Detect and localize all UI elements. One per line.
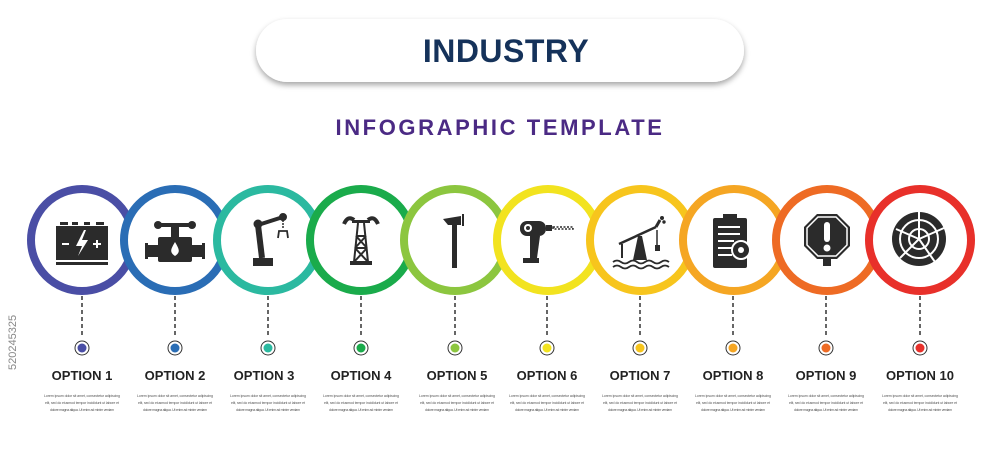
- option 5: Lorem ipsum dolor sit amet, consectetur adipiscing: [419, 394, 495, 398]
- option 1: Lorem ipsum dolor sit amet, consectetur adipiscing: [44, 394, 120, 398]
- option 6: dolore magna aliqua. Ut enim ad minim veniam: [515, 408, 579, 412]
- option 4: OPTION 4: [331, 368, 392, 383]
- icon: battery: [56, 222, 108, 265]
- option 1: OPTION 1: [52, 368, 112, 383]
- option 7: OPTION 7: [610, 368, 670, 383]
- option 9: [776, 189, 878, 412]
- option 2: [124, 189, 226, 412]
- icon: warning sign: [804, 214, 850, 266]
- option 9: Lorem ipsum dolor sit amet, consectetur adipiscing: [788, 394, 864, 398]
- option 8: dolore magna aliqua. Ut enim ad minim veniam: [701, 408, 765, 412]
- option 4: Lorem ipsum dolor sit amet, consectetur adipiscing: [323, 394, 399, 398]
- option 9: dolore magna aliqua. Ut enim ad minim veniam: [794, 408, 858, 412]
- option 7: elit, sed do eiusmod tempor incididunt ut labore et: [603, 401, 677, 405]
- option 6: OPTION 6: [517, 368, 577, 383]
- option 1: dolore magna aliqua. Ut enim ad minim veniam: [50, 408, 114, 412]
- option 3: OPTION 3: [234, 368, 294, 383]
- option 10: Lorem ipsum dolor sit amet, consectetur adipiscing: [882, 394, 958, 398]
- icon: hammer: [443, 214, 464, 268]
- option 4: dolore magna aliqua. Ut enim ad minim veniam: [329, 408, 393, 412]
- option 8: Lorem ipsum dolor sit amet, consectetur adipiscing: [695, 394, 771, 398]
- icon: pipe valve: [145, 221, 205, 262]
- icon: drill: [520, 221, 573, 263]
- option 6: elit, sed do eiusmod tempor incididunt ut labore et: [510, 401, 584, 405]
- icon: oil derrick: [344, 218, 378, 265]
- option 5: elit, sed do eiusmod tempor incididunt ut labore et: [420, 401, 494, 405]
- option 7: Lorem ipsum dolor sit amet, consectetur adipiscing: [602, 394, 678, 398]
- title: INDUSTRY: [423, 33, 589, 69]
- option 9: elit, sed do eiusmod tempor incididunt ut labore et: [789, 401, 863, 405]
- option 10: OPTION 10: [886, 368, 954, 383]
- option 10: [869, 189, 971, 412]
- option 9: OPTION 9: [796, 368, 856, 383]
- option 1: elit, sed do eiusmod tempor incididunt ut labore et: [45, 401, 119, 405]
- option 6: [497, 189, 599, 412]
- icon: offshore pump jack: [613, 216, 669, 268]
- option 2: OPTION 2: [145, 368, 205, 383]
- option 6: Lorem ipsum dolor sit amet, consectetur adipiscing: [509, 394, 585, 398]
- icon: radar chart: [892, 212, 946, 266]
- option 10: dolore magna aliqua. Ut enim ad minim veniam: [888, 408, 952, 412]
- option 8: [683, 189, 785, 412]
- option 5: dolore magna aliqua. Ut enim ad minim veniam: [425, 408, 489, 412]
- option 8: OPTION 8: [703, 368, 763, 383]
- option 5: OPTION 5: [427, 368, 487, 383]
- side id text: 520245325: [7, 315, 19, 370]
- subtitle: INFOGRAPHIC TEMPLATE: [335, 115, 665, 140]
- icon: robotic arm: [253, 214, 288, 266]
- option 7: [590, 189, 692, 412]
- option 4: elit, sed do eiusmod tempor incididunt ut labore et: [324, 401, 398, 405]
- option 2: elit, sed do eiusmod tempor incididunt ut labore et: [138, 401, 212, 405]
- option 3: Lorem ipsum dolor sit amet, consectetur adipiscing: [230, 394, 306, 398]
- option 5: [404, 189, 506, 412]
- option 3: [217, 189, 319, 412]
- option 4: [310, 189, 412, 412]
- option 1: [31, 189, 133, 412]
- title pill: [256, 19, 744, 82]
- icon: clipboard with gear: [713, 214, 750, 268]
- option 3: dolore magna aliqua. Ut enim ad minim veniam: [236, 408, 300, 412]
- option 2: dolore magna aliqua. Ut enim ad minim veniam: [143, 408, 207, 412]
- option 10: elit, sed do eiusmod tempor incididunt ut labore et: [883, 401, 957, 405]
- option 2: Lorem ipsum dolor sit amet, consectetur adipiscing: [137, 394, 213, 398]
- option 7: dolore magna aliqua. Ut enim ad minim veniam: [608, 408, 672, 412]
- option 8: elit, sed do eiusmod tempor incididunt ut labore et: [696, 401, 770, 405]
- option 3: elit, sed do eiusmod tempor incididunt ut labore et: [231, 401, 305, 405]
